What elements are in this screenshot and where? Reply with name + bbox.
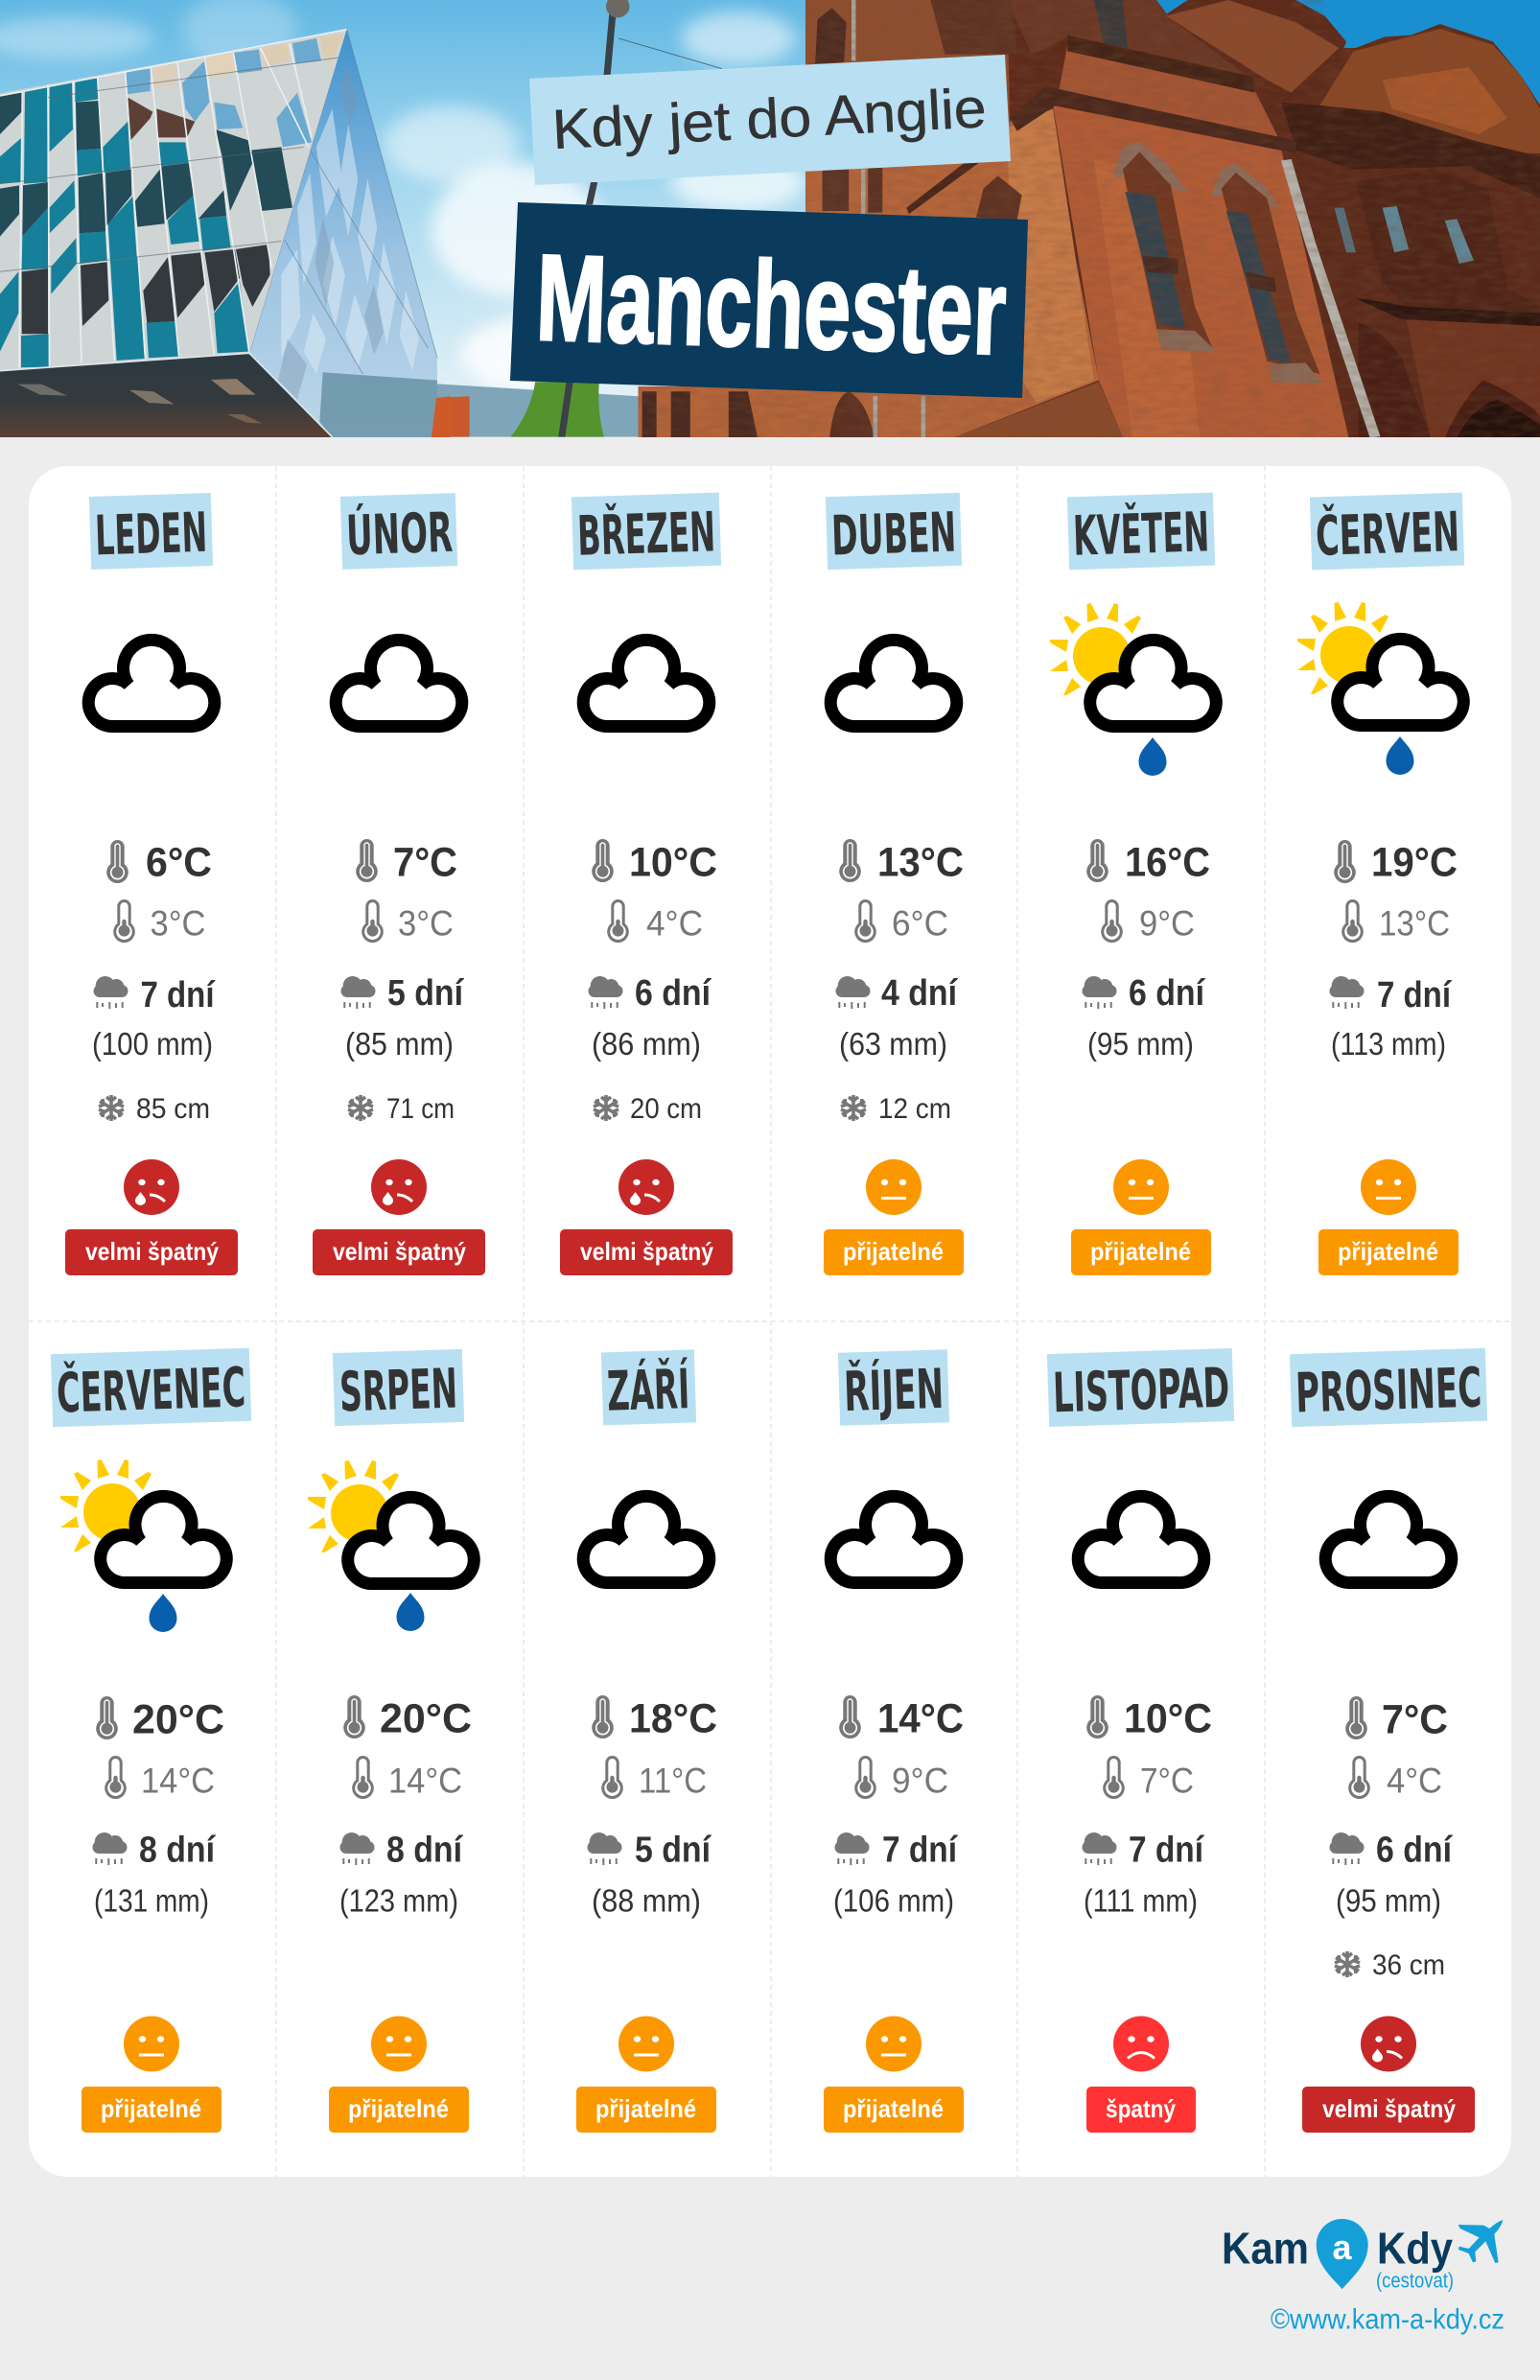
icon: rating face <box>124 2016 179 2071</box>
icon: thermometer high <box>1086 1695 1108 1738</box>
month heading: ZÁŘÍ <box>606 1356 690 1424</box>
icon: rating face <box>371 2016 427 2071</box>
rainy days: 7 dní <box>882 1830 958 1870</box>
rainy days: 8 dní <box>386 1830 463 1870</box>
low temperature: 14°C <box>141 1761 215 1801</box>
icon: thermometer high <box>1345 1696 1367 1739</box>
precipitation: (86 mm) <box>592 1026 701 1062</box>
icon: cloud <box>336 640 462 727</box>
month: DUBEN <box>824 493 964 1275</box>
icon: location pin <box>1317 2219 1368 2289</box>
low temperature: 3°C <box>398 903 454 944</box>
month heading <box>340 493 457 570</box>
icon: rating face <box>124 1159 179 1215</box>
month heading <box>51 1348 251 1427</box>
month heading <box>1067 493 1215 570</box>
month: ČERVENEC <box>51 1348 251 2133</box>
precipitation: (131 mm) <box>94 1883 209 1918</box>
precipitation: (88 mm) <box>592 1883 701 1918</box>
rating badge <box>329 2087 469 2133</box>
rating badge <box>824 2087 964 2133</box>
icon: rating face <box>1113 2016 1169 2071</box>
icon: thermometer high <box>1334 840 1356 883</box>
icon: rating face <box>866 2016 922 2071</box>
high temperature: 20°C <box>380 1695 472 1741</box>
month: PROSINEC <box>1290 1348 1487 2133</box>
icon: snow <box>841 1095 866 1121</box>
snowfall: 20 cm <box>630 1093 702 1125</box>
snowfall: 12 cm <box>878 1093 951 1125</box>
icon: thermometer low <box>352 1756 374 1799</box>
icon: rating face <box>371 1159 427 1215</box>
logo: Kam a Kdy <box>1222 2219 1503 2292</box>
month heading <box>826 493 962 570</box>
rainy days: 6 dní <box>1129 973 1205 1014</box>
low temperature: 4°C <box>1387 1761 1442 1801</box>
website credit: ©www.kam-a-kdy.cz <box>1271 2303 1505 2335</box>
month: LEDEN <box>65 493 238 1275</box>
rating badge: špatný <box>1106 2094 1176 2123</box>
icon: cloud <box>88 640 215 727</box>
low temperature: 9°C <box>892 1761 948 1801</box>
rating badge: přijatelné <box>595 2094 696 2123</box>
icon: rating face <box>1361 2016 1416 2071</box>
icon: rain <box>589 976 623 1009</box>
rainy days: 4 dní <box>881 973 958 1014</box>
month heading <box>1310 493 1464 571</box>
icon: cloud <box>830 640 957 727</box>
precipitation: (111 mm) <box>1084 1883 1198 1918</box>
month heading: SRPEN <box>338 1358 458 1424</box>
low temperature: 13°C <box>1379 903 1450 944</box>
high temperature: 7°C <box>393 840 457 886</box>
month heading: LISTOPAD <box>1052 1357 1230 1425</box>
high temperature: 19°C <box>1371 840 1458 886</box>
icon: rain <box>341 976 376 1009</box>
rating badge <box>1318 1229 1458 1275</box>
icon: thermometer high <box>356 839 378 882</box>
rating badge: přijatelné <box>101 2094 201 2123</box>
rating badge <box>1086 2087 1196 2133</box>
month: ZÁŘÍ <box>576 1349 717 2133</box>
precipitation: (63 mm) <box>839 1026 947 1062</box>
high temperature: 16°C <box>1125 840 1210 886</box>
rainy days: 5 dní <box>387 973 464 1014</box>
rating badge <box>576 2087 716 2133</box>
snowfall: 36 cm <box>1372 1949 1445 1981</box>
rating badge <box>1071 1229 1211 1275</box>
logo word: Kdy: Kdy <box>1377 2223 1453 2273</box>
month heading: ČERVENEC <box>56 1354 246 1426</box>
icon: sun behind cloud with rain drop <box>1050 603 1216 776</box>
icon: rating face <box>618 1159 674 1215</box>
month heading: ÚNOR <box>345 500 454 568</box>
snowfall: 85 cm <box>136 1093 210 1125</box>
icon: sun behind cloud with rain drop <box>308 1460 474 1631</box>
icon: cloud <box>583 1496 710 1582</box>
high temperature: 7°C <box>1382 1697 1448 1743</box>
month: ÚNOR <box>313 493 485 1275</box>
precipitation: (113 mm) <box>1331 1026 1446 1062</box>
high temperature: 14°C <box>877 1695 964 1741</box>
title tag: Manchester: Manchester <box>534 229 1008 381</box>
month: LISTOPAD <box>1047 1348 1234 2133</box>
icon: thermometer low <box>362 899 384 943</box>
icon: cloud <box>830 1496 957 1582</box>
month heading <box>333 1349 464 1426</box>
icon: rain <box>1082 976 1116 1009</box>
rating badge: přijatelné <box>348 2094 449 2123</box>
icon: rating face <box>618 2016 674 2071</box>
title tag: Manchester <box>510 202 1028 398</box>
icon: thermometer low <box>601 1756 623 1799</box>
high temperature: 13°C <box>877 840 964 886</box>
snowfall: 71 cm <box>386 1093 455 1125</box>
icon: sun behind cloud with rain drop <box>1297 602 1463 775</box>
rating badge: velmi špatný <box>580 1237 713 1266</box>
rainy days: 6 dní <box>1376 1830 1453 1870</box>
high temperature: 10°C <box>1124 1695 1212 1741</box>
icon: rain <box>834 1832 869 1865</box>
icon: sun behind cloud with rain drop <box>60 1459 226 1632</box>
rating badge <box>82 2087 222 2133</box>
title tag: Kdy jet do Anglie <box>529 55 1011 185</box>
rainy days: 7 dní <box>1129 1830 1204 1870</box>
month: SRPEN <box>308 1349 474 2133</box>
month heading <box>601 1349 696 1425</box>
precipitation: (95 mm) <box>1336 1883 1441 1918</box>
month heading: ŘÍJEN <box>843 1356 945 1424</box>
icon: snow <box>348 1095 373 1121</box>
month: ČERVEN <box>1297 493 1464 1275</box>
glass building <box>0 30 451 437</box>
header photo: Manchester architecture <box>0 0 1540 437</box>
icon: thermometer high <box>592 1695 614 1738</box>
low temperature: 14°C <box>388 1761 462 1801</box>
month heading: LEDEN <box>94 502 208 568</box>
title tag: Kdy jet do Anglie: Kdy jet do Anglie <box>550 77 988 161</box>
month heading: BŘEZEN <box>576 499 716 569</box>
icon: rain <box>1329 976 1364 1009</box>
icon: thermometer high <box>592 839 614 882</box>
precipitation: (106 mm) <box>833 1883 954 1918</box>
icon: rating face <box>1113 1159 1169 1215</box>
icon: thermometer high <box>96 1696 118 1739</box>
rainy days: 7 dní <box>1377 975 1452 1015</box>
month: ŘÍJEN <box>824 1349 964 2133</box>
icon: rain <box>94 976 128 1009</box>
icon: cloud <box>1325 1496 1452 1582</box>
icon: thermometer high <box>106 840 128 883</box>
month heading: KVĚTEN <box>1072 499 1210 569</box>
month heading <box>1047 1348 1234 1427</box>
icon: thermometer low <box>854 1756 876 1799</box>
icon: rain <box>1082 1832 1116 1865</box>
glass front face <box>0 30 347 371</box>
rating badge: přijatelné <box>843 2094 944 2123</box>
rating badge <box>560 1229 733 1275</box>
rating badge <box>313 1229 485 1275</box>
logo subtitle: (cestovat) <box>1376 2269 1454 2292</box>
low temperature: 11°C <box>639 1761 707 1801</box>
logo word: Kam: Kam <box>1222 2223 1309 2273</box>
icon: thermometer low <box>1101 899 1123 943</box>
low temperature: 7°C <box>1140 1761 1194 1801</box>
rating badge <box>1302 2087 1475 2133</box>
low temperature: 6°C <box>892 903 948 944</box>
month heading <box>838 1349 949 1426</box>
icon: thermometer low <box>105 1756 127 1799</box>
precipitation: (95 mm) <box>1087 1026 1194 1062</box>
icon: thermometer high <box>1086 839 1108 882</box>
high temperature: 6°C <box>146 840 212 886</box>
rating badge: velmi špatný <box>1322 2094 1456 2123</box>
icon: thermometer low <box>113 899 135 943</box>
precipitation: (123 mm) <box>339 1883 458 1918</box>
icon: rain <box>339 1832 374 1865</box>
month heading: DUBEN <box>830 501 957 569</box>
high temperature: 20°C <box>132 1697 224 1743</box>
icon: cloud <box>1078 1496 1204 1582</box>
icon: thermometer low <box>607 899 629 943</box>
precipitation: (100 mm) <box>92 1026 213 1062</box>
brick building <box>639 0 1540 437</box>
icon: cloud <box>583 640 710 727</box>
precipitation: (85 mm) <box>345 1026 454 1062</box>
logo letter: a: a <box>1333 2228 1352 2267</box>
icon: thermometer low <box>1342 899 1364 943</box>
icon: thermometer high <box>839 839 861 882</box>
rating badge: velmi špatný <box>333 1237 466 1266</box>
icon: thermometer low <box>854 899 876 943</box>
low temperature: 9°C <box>1139 903 1195 944</box>
rating badge: přijatelné <box>843 1237 944 1266</box>
month: KVĚTEN <box>1050 493 1216 1275</box>
icon: rain <box>1329 1832 1364 1865</box>
icon: rain <box>92 1832 127 1865</box>
high temperature: 18°C <box>629 1695 717 1741</box>
icon: snow <box>594 1095 618 1121</box>
icon: thermometer high <box>839 1695 861 1738</box>
rating badge: velmi špatný <box>85 1237 219 1266</box>
table dividers <box>29 466 1511 2177</box>
month: BŘEZEN <box>560 493 733 1275</box>
rainy days: 5 dní <box>635 1830 712 1870</box>
icon: snow <box>1335 1951 1360 1977</box>
rainy days: 7 dní <box>140 975 216 1015</box>
low temperature: 3°C <box>150 903 205 944</box>
rating badge <box>824 1229 964 1275</box>
icon: snow <box>99 1095 124 1121</box>
month heading <box>89 493 213 570</box>
icon: rain <box>587 1832 621 1865</box>
rating badge <box>65 1229 238 1275</box>
panel: monthly climate table <box>29 466 1511 2177</box>
icon: thermometer low <box>1103 1756 1125 1799</box>
rainy days: 6 dní <box>635 973 712 1014</box>
icon: airplane <box>1458 2220 1503 2263</box>
icon: thermometer high <box>343 1695 365 1738</box>
icon: rating face <box>866 1159 922 1215</box>
icon: rating face <box>1361 1159 1416 1215</box>
low temperature: 4°C <box>646 903 703 944</box>
rating badge: přijatelné <box>1338 1237 1438 1266</box>
rating badge: přijatelné <box>1090 1237 1191 1266</box>
month heading <box>572 493 721 570</box>
glass underside <box>0 353 333 437</box>
rainy days: 8 dní <box>139 1830 216 1870</box>
icon: thermometer low <box>1348 1756 1370 1799</box>
icon: rain <box>836 976 871 1009</box>
high temperature: 10°C <box>629 840 717 886</box>
